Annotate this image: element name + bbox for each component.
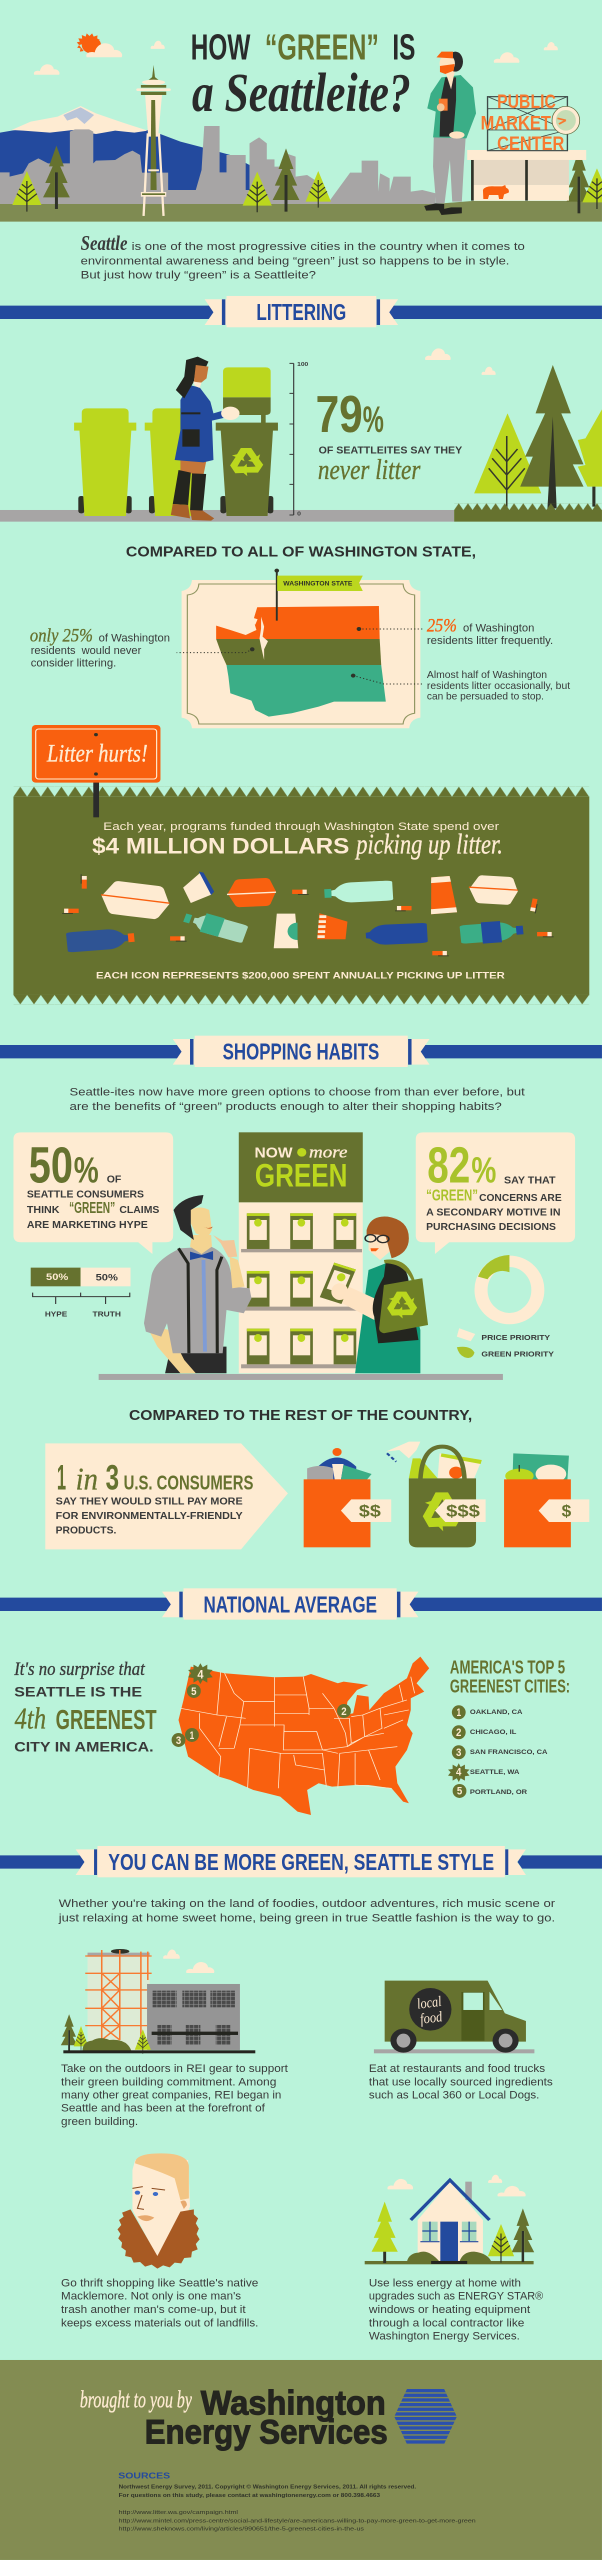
text: 4th greenest xyxy=(13,1657,157,1755)
flag: Washington State xyxy=(274,569,363,621)
text: thrift shopping: Macklemore. Not only is one man's xyxy=(61,2289,241,2302)
callout: 50 percent speech bubble: SEATTLE CONSUMERS xyxy=(27,1189,144,1200)
city skyline xyxy=(0,126,436,204)
chart: hype vs truth bar: 50% xyxy=(46,1273,68,1283)
map: Washington state bands xyxy=(216,606,386,717)
text: use less energy: upgrades such as ENERGY STAR® xyxy=(369,2289,543,2302)
callout: 82 percent speech bubble: A SECONDARY MOTIVE IN xyxy=(426,1207,561,1218)
callout: 25 percent litter frequently xyxy=(427,614,553,647)
sources: http://www.sheknows.com/living/articles/990651/the-5-greenest-cities-in-the-us xyxy=(119,2527,364,2532)
text: thrift shopping: keeps excess materials out of landfills. xyxy=(61,2316,258,2329)
heading: compared to Washington: COMPARED TO ALL OF WASHINGTON STATE, xyxy=(126,544,476,560)
callout: only 25 percent: only 25% xyxy=(30,624,93,646)
sources: http://www.litter.wa.gov/campaign.html xyxy=(119,2510,238,2516)
map: United States xyxy=(172,1657,429,1815)
icons: litter pictogram xyxy=(62,872,554,956)
panel: thrift and energy xyxy=(0,2153,602,2560)
stat: 79 percent xyxy=(316,385,462,485)
icon: reusable bag three dollars: $$$ xyxy=(446,1502,480,1520)
footer: brought to you by logo: Energy Services xyxy=(145,2413,388,2451)
banner: littering: LITTERING xyxy=(256,300,346,326)
text: local food: that use locally sourced ingredients xyxy=(369,2075,553,2088)
panel: be more green xyxy=(0,1846,602,2128)
text: 4th greenest: It's no surprise that xyxy=(13,1657,146,1680)
heading: compared to the country: COMPARED TO THE REST OF THE COUNTRY, xyxy=(129,1407,472,1424)
ground xyxy=(0,201,602,222)
chart: hype vs truth bar: HYPE xyxy=(45,1310,68,1318)
flag: Washington State: WASHINGTON STATE xyxy=(283,581,353,587)
intro text: But just how truly “green” is a Seattleite? xyxy=(81,268,316,281)
text: use less energy xyxy=(368,2276,543,2342)
illustration: store shelf display xyxy=(239,1132,363,1373)
map: United States: 2 xyxy=(341,1707,347,1718)
illustration: woman recycling xyxy=(171,357,240,521)
title: IS xyxy=(392,28,415,68)
icon: grocery bag one dollar: $ xyxy=(562,1502,571,1520)
illustration: market building: MARKET xyxy=(481,113,551,134)
list: top 5 greenest cities: 3 xyxy=(456,1748,461,1759)
caption: each icon: EACH ICON REPRESENTS $200,000 SPENT ANNUALLY PICKING UP LITTER xyxy=(96,971,505,981)
title: a Seattleite? xyxy=(192,62,411,123)
callout: 50 percent speech bubble: OF xyxy=(107,1174,122,1185)
callout: 25 percent litter frequently: residents litter frequently. xyxy=(427,634,553,647)
callout: only 25 percent xyxy=(30,624,170,669)
banner: shopping habits xyxy=(0,1036,602,1067)
illustration: store shelf display: more xyxy=(309,1142,347,1162)
callout: 1 in 3 arrow: FOR ENVIRONMENTALLY-FRIENDLY xyxy=(56,1511,243,1522)
illustration: Macklemore portrait xyxy=(117,2153,200,2269)
intro text: be more green: just relaxing at home sweet home, being green in true Seattle fashion is the way to go. xyxy=(58,1911,555,1924)
stat: 79 percent: OF SEATTLEITES SAY THEY xyxy=(319,445,462,456)
text: use less energy: Washington Energy Services. xyxy=(369,2329,520,2342)
title: HOW xyxy=(191,28,250,68)
footer: brought to you by logo: brought to you by xyxy=(80,2386,192,2413)
illustration: energy efficient house xyxy=(365,2175,534,2264)
text: thrift shopping: Go thrift shopping like Seattle's native xyxy=(61,2276,259,2289)
banner: shopping habits: SHOPPING HABITS xyxy=(223,1040,379,1065)
callout: 1 in 3 arrow: 1 xyxy=(57,1458,66,1497)
legend: price and green priority: GREEN PRIORITY xyxy=(481,1350,554,1358)
chart: hype vs truth bar: 50% xyxy=(96,1273,118,1283)
chart: priority donut xyxy=(478,1255,538,1319)
chart: hype vs truth bar: TRUTH xyxy=(93,1310,121,1318)
banner: you can be more green xyxy=(0,1846,602,1877)
callout: almost half: Almost half of Washington xyxy=(427,671,547,681)
title: “GREEN” xyxy=(265,28,379,68)
text: spend over 4 million xyxy=(92,820,503,860)
illustration: market building xyxy=(467,91,586,201)
trees xyxy=(12,146,602,213)
text: 4th greenest: CITY IN AMERICA. xyxy=(14,1740,154,1755)
callout: 82 percent speech bubble xyxy=(416,1132,575,1254)
title xyxy=(191,28,415,123)
footer background xyxy=(0,2360,602,2560)
callout: 1 in 3 arrow: PRODUCTS. xyxy=(56,1525,116,1536)
mountain xyxy=(0,106,250,193)
list: top 5 greenest cities: SAN FRANCISCO, CA xyxy=(470,1749,548,1756)
callout: 82 percent speech bubble: 82 xyxy=(427,1136,470,1194)
callout: almost half: can be persuaded to stop. xyxy=(427,692,544,702)
text: spend over 4 million: picking up litter. xyxy=(355,828,503,860)
text: use less energy: Use less energy at home with xyxy=(369,2276,521,2289)
callout: 50 percent speech bubble xyxy=(13,1132,173,1254)
text: 4th greenest: SEATTLE IS THE xyxy=(14,1685,142,1700)
icon: space needle xyxy=(136,65,171,216)
text: thrift shopping xyxy=(61,2276,259,2329)
text: REI: Take on the outdoors in REI gear to support xyxy=(61,2062,289,2075)
intro text: environmental awareness and being “green” just so happens to be in style. xyxy=(81,254,509,267)
text: REI: Seattle and has been at the forefront of xyxy=(61,2101,266,2114)
callout: 25 percent litter frequently: of Washington xyxy=(463,621,534,634)
list: top 5 greenest cities: CHICAGO, IL xyxy=(470,1729,516,1736)
text: spend over 4 million: Each year, programs funded through Washington State spend over xyxy=(103,820,499,833)
chart: hype vs truth bar xyxy=(31,1268,131,1318)
callout: only 25 percent: consider littering. xyxy=(31,656,116,669)
callout: only 25 percent: residents would never xyxy=(31,644,141,657)
text: spend over 4 million: $4 MILLION DOLLARS xyxy=(92,835,349,859)
intro text xyxy=(81,231,525,281)
text: local food: Eat at restaurants and food trucks xyxy=(369,2062,545,2075)
intro text: be more green: Whether you're taking on the land of foodies, outdoor adventures, rich music scene or xyxy=(59,1897,555,1910)
banner: national average: NATIONAL AVERAGE xyxy=(203,1593,377,1618)
intro text: is one of the most progressive cities in the country when it comes to xyxy=(132,240,525,253)
list: top 5 greenest cities: 1 xyxy=(456,1708,461,1719)
callout: 25 percent litter frequently: 25% xyxy=(427,614,457,636)
callout: almost half: residents litter occasionally, but xyxy=(427,682,570,692)
footer: brought to you by logo xyxy=(80,2384,457,2451)
list: top 5 greenest cities xyxy=(448,1658,570,1798)
sources: http://www.mintel.com/press-centre/social-and-lifestyle/are-americans-willing-to-pay-more-green-to-get-more-green xyxy=(119,2519,476,2524)
panel: header illustration and title xyxy=(0,28,602,327)
counter xyxy=(99,1374,503,1380)
text: local food xyxy=(369,2062,553,2101)
sources: Northwest Energy Survey, 2011. Copyright © Washington Energy Services, 2011. All rights reserved. xyxy=(119,2484,417,2490)
text: REI: many other great companies, REI began in xyxy=(61,2088,281,2101)
callout: 82 percent speech bubble: CONCERNS ARE xyxy=(479,1193,562,1204)
panel: Washington state map card xyxy=(182,569,420,728)
legend: price and green priority: PRICE PRIORITY xyxy=(481,1333,551,1342)
sign: litter hurts: Litter hurts! xyxy=(46,739,148,767)
stat: 79 percent: never litter xyxy=(318,454,420,485)
list: top 5 greenest cities: 5 xyxy=(457,1786,463,1797)
callout: 82 percent speech bubble: % xyxy=(471,1151,496,1191)
callout: 1 in 3 arrow: SAY THEY WOULD STILL PAY MORE xyxy=(56,1496,243,1507)
list: top 5 greenest cities: OAKLAND, CA xyxy=(470,1709,523,1716)
icon: reusable bag three dollars xyxy=(386,1442,486,1547)
illustration: local food truck xyxy=(374,1981,534,2053)
text: 4th greenest: GREENEST xyxy=(56,1705,157,1735)
list: top 5 greenest cities: PORTLAND, OR xyxy=(470,1789,527,1796)
illustration: woman with tote bag xyxy=(320,1216,428,1373)
list: top 5 greenest cities: 4 xyxy=(456,1767,462,1778)
zigzag panel background xyxy=(13,787,589,1004)
icon: recycling bins xyxy=(74,367,278,516)
illustration: market building: CENTER xyxy=(497,133,564,155)
text: REI: green building. xyxy=(61,2115,138,2128)
stat: 79 percent: % xyxy=(363,400,384,440)
banner: littering xyxy=(0,296,602,327)
callout: only 25 percent: of Washington xyxy=(99,631,170,644)
text: local food: such as Local 360 or Local Dogs. xyxy=(369,2088,539,2101)
illustration: man with bow tie xyxy=(144,1195,251,1373)
scale axis: 0 xyxy=(297,512,301,517)
panel: comparison and national average xyxy=(0,1407,602,1815)
sources: For questions on this study, please contact at washingtonenergy.com or 800.398.4663 xyxy=(119,2493,380,2499)
scale axis xyxy=(289,362,308,517)
illustration: local food truck: local xyxy=(416,1994,443,2012)
stat: 79 percent: 79 xyxy=(316,385,363,443)
callout: 50 percent speech bubble: “GREEN” xyxy=(69,1199,115,1217)
panel: litter cost xyxy=(13,725,589,1004)
callout: 50 percent speech bubble: THINK xyxy=(27,1205,60,1216)
text: thrift shopping: trash another man's come-up, but it xyxy=(61,2303,246,2316)
icon: sun and clouds xyxy=(34,33,558,75)
illustration: store shelf display: GREEN xyxy=(255,1158,347,1194)
banner: national average xyxy=(0,1588,602,1620)
panel: shopping habits xyxy=(0,1036,602,1380)
callout: 1 in 3 arrow: 3 xyxy=(106,1458,119,1497)
illustration: market building: PUBLIC xyxy=(497,91,556,113)
intro text: shopping xyxy=(69,1085,526,1113)
callout: 1 in 3 arrow: in xyxy=(76,1462,98,1497)
text: 4th greenest: 4th xyxy=(15,1702,46,1736)
icon: grocery bag two dollars xyxy=(304,1448,391,1547)
callout: 82 percent speech bubble: SAY THAT xyxy=(504,1175,556,1186)
text: REI xyxy=(61,2062,289,2128)
text: use less energy: through a local contractor like xyxy=(369,2316,525,2329)
intro text: shopping: are the benefits of “green” products enough to alter their shopping habits? xyxy=(69,1100,502,1113)
illustration: store shelf display: NOW xyxy=(255,1145,293,1161)
illustration: local food truck: food xyxy=(419,2009,444,2027)
icon: grocery bag one dollar xyxy=(504,1453,589,1547)
callout: 82 percent speech bubble: PURCHASING DECISIONS xyxy=(426,1222,556,1233)
illustration: REI building xyxy=(61,1949,255,2054)
text: use less energy: windows or heating equipment xyxy=(368,2303,531,2316)
trees and grass xyxy=(425,348,602,522)
map: United States: 3 xyxy=(176,1736,181,1747)
text: REI: their green building commitment. Among xyxy=(61,2075,276,2088)
scale axis: 100 xyxy=(297,362,308,368)
callout: 50 percent speech bubble: CLAIMS xyxy=(119,1205,159,1216)
intro text: be more green xyxy=(58,1897,555,1924)
callout: 50 percent speech bubble: 50 xyxy=(29,1136,73,1194)
callout: almost half xyxy=(427,671,570,702)
map: United States: 1 xyxy=(190,1731,195,1742)
icon: grocery bag two dollars: $$ xyxy=(359,1502,381,1520)
callout: 82 percent speech bubble: “GREEN” xyxy=(426,1187,478,1204)
intro text: shopping: Seattle-ites now have more green options to choose from than ever before, but xyxy=(69,1085,526,1098)
panel: littering xyxy=(0,348,602,728)
callout: 1 in 3 arrow: U.S. CONSUMERS xyxy=(124,1471,253,1494)
callout: 50 percent speech bubble: % xyxy=(74,1151,99,1191)
map: United States: 5 xyxy=(191,1687,197,1698)
callout leader lines xyxy=(177,627,422,684)
sources xyxy=(118,2471,476,2532)
illustration: hipster man xyxy=(424,52,476,215)
sidewalk xyxy=(0,510,454,522)
callout: 1 in 3 arrow xyxy=(45,1443,288,1549)
list: top 5 greenest cities: SEATTLE, WA xyxy=(470,1769,519,1776)
list: top 5 greenest cities: 2 xyxy=(456,1728,461,1739)
callout: 50 percent speech bubble: ARE MARKETING HYPE xyxy=(27,1220,148,1231)
intro text: Seattle xyxy=(81,231,128,255)
footer: brought to you by logo: Washington xyxy=(201,2384,386,2422)
sign: litter hurts xyxy=(32,725,160,817)
map: United States: 4 xyxy=(197,1667,204,1681)
legend: price and green priority xyxy=(457,1328,554,1358)
sources: SOURCES xyxy=(118,2471,170,2480)
